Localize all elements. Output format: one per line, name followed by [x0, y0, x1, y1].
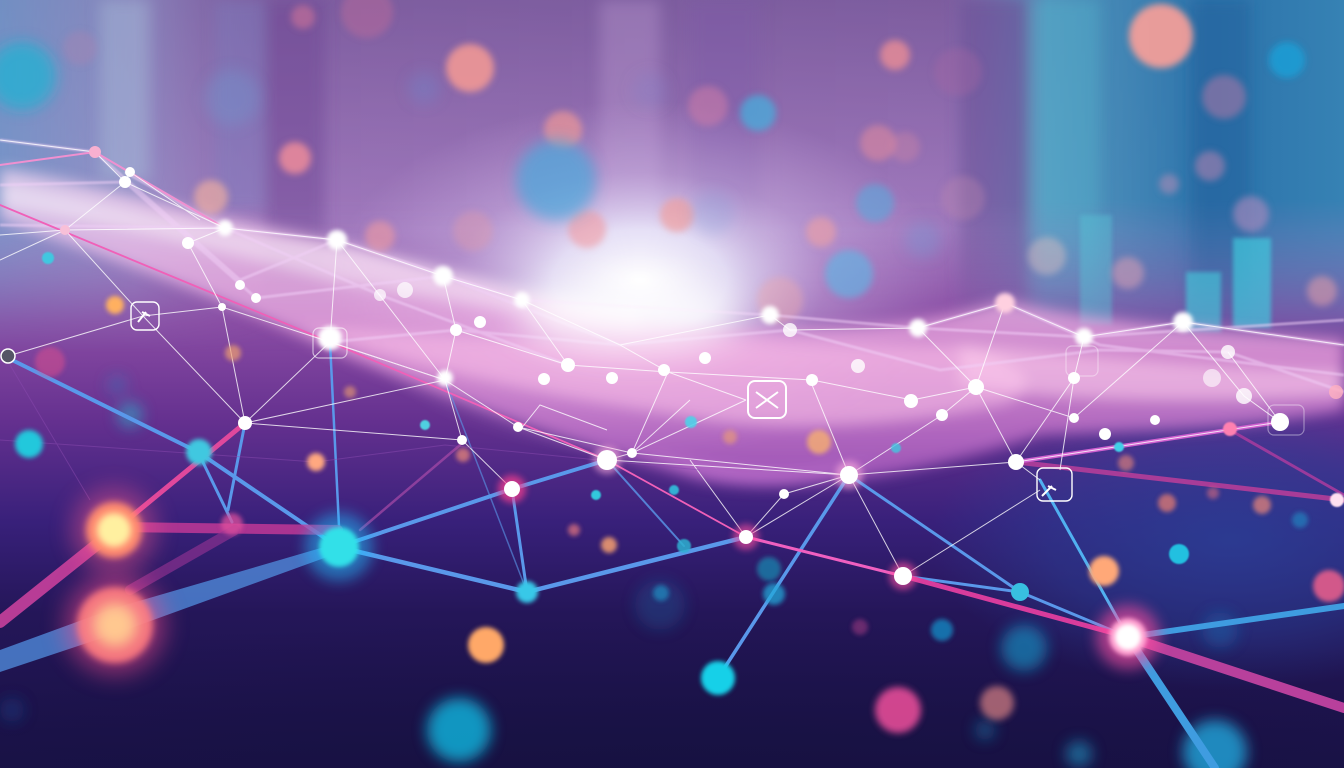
dim background lines in dark area	[0, 365, 700, 500]
central light glow	[330, 100, 950, 460]
background bokeh: pastel upper	[63, 0, 1337, 323]
background: blurred vertical columns	[100, 0, 1250, 320]
mesh: thin white lines	[0, 140, 1344, 576]
pink translucent wave band	[0, 168, 1344, 486]
central highlight over mesh	[520, 281, 740, 349]
glowing nodes: large	[65, 439, 1160, 695]
mesh: pink ribbons	[0, 152, 1344, 708]
mesh: thick blue lines	[8, 342, 1344, 768]
colored small dots	[15, 252, 1344, 733]
network node icons: rounded squares	[131, 302, 1304, 501]
mesh: wide blue ribbon	[0, 543, 338, 672]
mesh: translucent lavender strands on wave	[0, 140, 1344, 392]
background: bar chart silhouettes	[1080, 215, 1271, 332]
glowing nodes: white core	[1, 146, 1343, 590]
